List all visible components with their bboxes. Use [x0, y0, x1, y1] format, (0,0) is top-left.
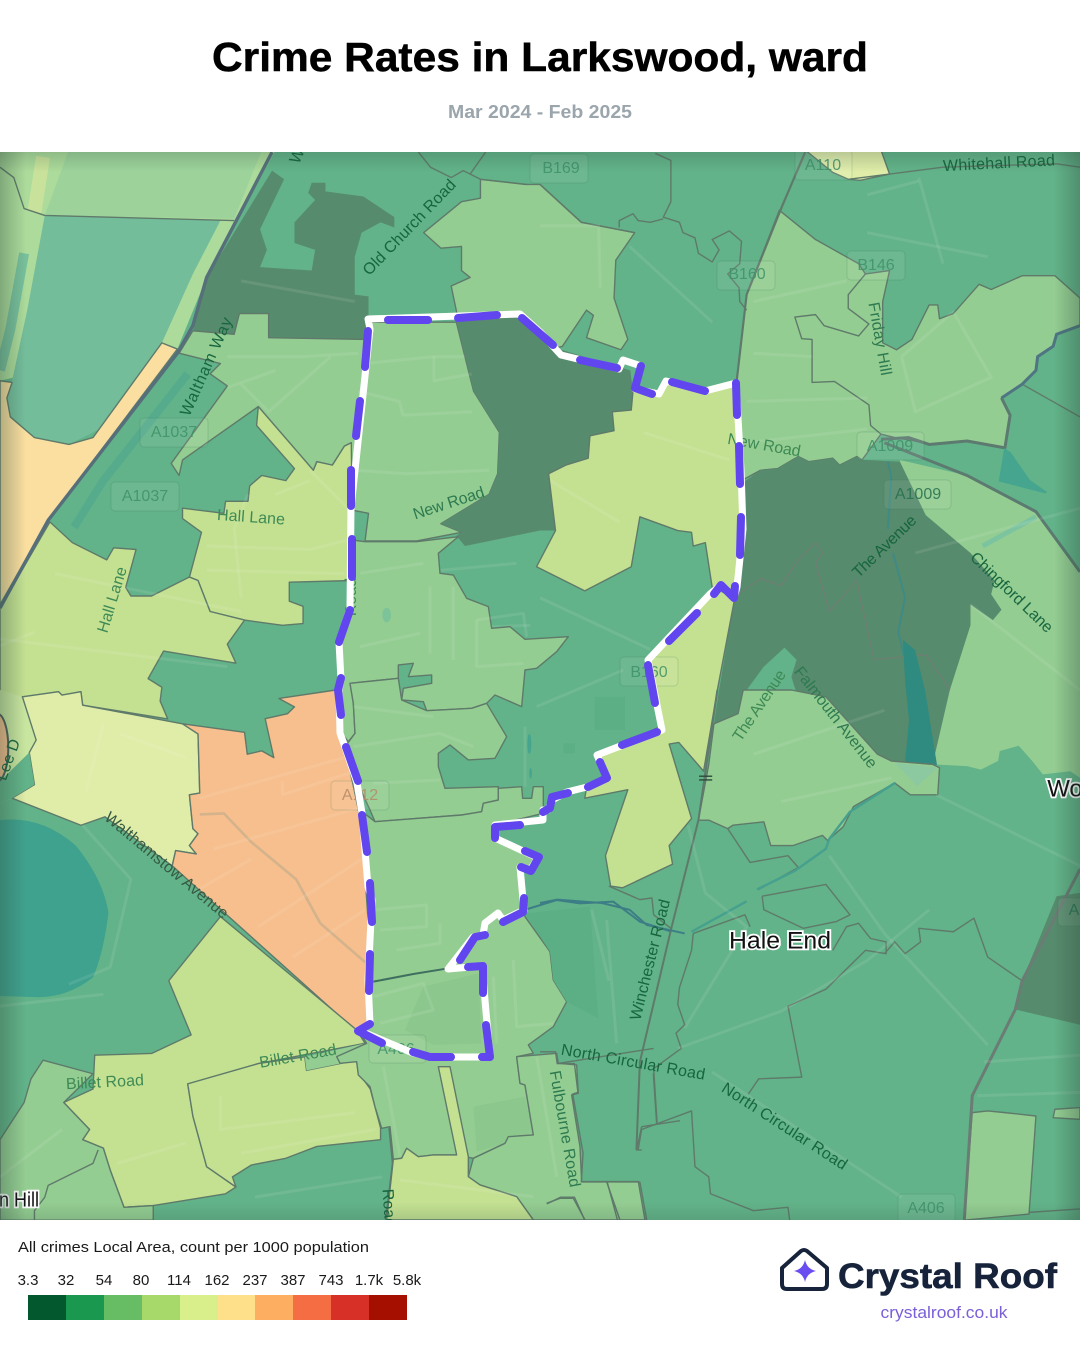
legend scale values	[18, 1272, 422, 1289]
legend scale values: 237	[242, 1272, 268, 1289]
legend scale values: 387	[280, 1272, 306, 1289]
road label: Falmouth Avenue: Falmouth Avenue	[790, 664, 880, 772]
road label: Fulbourne Road: Fulbourne Road	[546, 1069, 583, 1189]
logo wordmark: Crystal Roof	[838, 1257, 1057, 1296]
road label: Billet Road west: Billet Road	[66, 1072, 144, 1093]
shield: B160 upper: B160	[728, 266, 766, 283]
shield: A112: A112	[342, 787, 378, 804]
road label: Billet Road east: Billet Road	[258, 1042, 338, 1072]
legend scale values: 80	[133, 1272, 149, 1289]
road label: Old Church Road: Old Church Road	[360, 177, 460, 279]
shield: A110: A110	[805, 157, 841, 174]
shield: B160 lower	[620, 657, 678, 686]
map regions: south-west	[0, 690, 393, 1220]
road label: Walthamstow Avenue: Walthamstow Avenue	[101, 809, 231, 923]
road label: Road (west ward edge): Road	[343, 578, 360, 616]
map regions: south-east	[540, 587, 1080, 1220]
legend scale values: 54	[96, 1272, 112, 1289]
legend colour swatches	[28, 1295, 407, 1320]
shield: A406 west	[369, 1035, 426, 1063]
shield: A406 south: A406	[907, 1200, 945, 1217]
subtitle: date range: Mar 2024 - Feb 2025	[448, 102, 632, 122]
road label: Road (bottom, clipped): Road	[378, 1188, 398, 1228]
legend scale values: 162	[204, 1272, 230, 1289]
road label: Hall Lane west: Hall Lane	[95, 565, 131, 635]
legend scale values: 32	[58, 1272, 74, 1289]
shield: A1009 upper: A1009	[867, 438, 913, 455]
legend scale values: 114	[167, 1272, 191, 1289]
place label: Hill (clipped): n Hill	[0, 1189, 39, 1211]
road label: The Avenue south: The Avenue	[730, 667, 790, 745]
river in the east woods	[903, 640, 937, 765]
legend scale values: 1.7k	[355, 1272, 384, 1289]
shield: A1009 lower: A1009	[895, 486, 941, 503]
shield: A1009 lower	[884, 480, 951, 509]
icon: house with star	[782, 1250, 827, 1289]
shield: B160 upper	[717, 261, 775, 290]
shield: B146	[847, 251, 905, 280]
legend scale values: 5.8k	[393, 1272, 422, 1289]
shield: B169: B169	[542, 160, 580, 177]
shield: B146: B146	[857, 257, 895, 274]
map regions: ward interior	[342, 537, 625, 822]
shield: B169	[530, 154, 588, 183]
shield: A1009 upper	[857, 432, 924, 460]
road label: Waltham Way: Waltham Way	[177, 315, 236, 419]
map regions: south of ward	[337, 787, 680, 1220]
road label: Winchester Road: Winchester Road	[627, 898, 674, 1022]
shield: A110	[795, 150, 852, 180]
road label: Whitehall Road: Whitehall Road	[943, 152, 1055, 175]
title: Crime Rates in Larkswood, ward	[212, 34, 868, 80]
map edge vignette	[0, 152, 1080, 1220]
shield: A1037 lower: A1037	[122, 488, 168, 505]
shield: A1037 lower	[111, 482, 179, 511]
logo: Crystal Roof	[782, 1250, 1057, 1322]
shield: A406 south	[898, 1194, 955, 1222]
road label: North Circular Road west: North Circular Road	[560, 1042, 706, 1084]
road label: New Road east: New Road	[726, 431, 802, 461]
road label: New Road west: New Road	[411, 484, 487, 523]
shield: A1037 upper	[140, 418, 208, 447]
road label: Friday Hill: Friday Hill	[864, 301, 894, 377]
shield: east edge	[1058, 898, 1080, 926]
legend	[18, 1239, 422, 1320]
shield: B160 lower: B160	[630, 664, 668, 681]
shield: east edge: A	[1069, 902, 1080, 919]
map regions: north-west	[0, 150, 635, 740]
place label: Hale End: Hale End	[729, 927, 831, 954]
shield: A1037 upper: A1037	[151, 424, 197, 441]
road label: Chingford Lane: Chingford Lane	[966, 549, 1056, 636]
road label: clipped Waltham Way: W	[287, 145, 309, 166]
legend scale values: 3.3	[18, 1272, 38, 1289]
shield: A406 west: A406	[377, 1041, 415, 1058]
road label: The Avenue north: The Avenue	[849, 512, 920, 581]
road label: Hall Lane east: Hall Lane	[217, 507, 286, 529]
legend title: All crimes Local Area, count per 1000 population	[18, 1239, 369, 1256]
legend scale values: 743	[318, 1272, 344, 1289]
road label: North Circular Road east: North Circular Road	[718, 1080, 850, 1174]
map regions: north-east	[537, 150, 1080, 778]
ward boundary: Larkswood	[338, 314, 743, 1057]
website url: crystalroof.co.uk	[880, 1304, 1008, 1322]
shield: A112	[331, 781, 389, 810]
